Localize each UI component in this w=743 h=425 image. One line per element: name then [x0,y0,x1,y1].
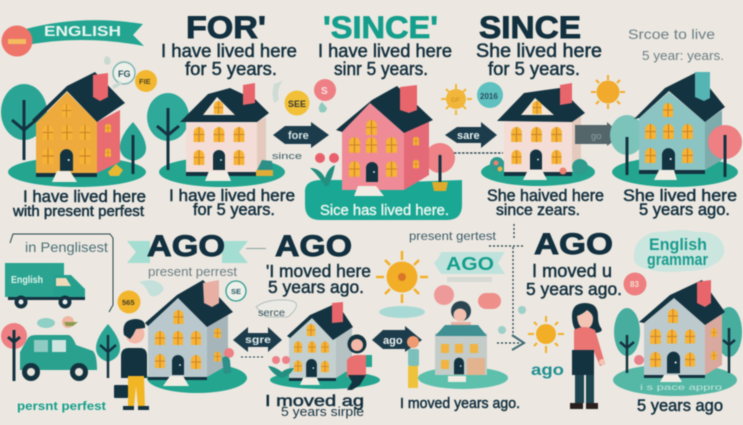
arrow: sare: sare [457,130,480,142]
label: 5 years ago: 5 years ago [637,397,723,415]
arrow: double sare [233,327,282,352]
scene: faded bubbles [379,277,526,334]
dashed connector [241,356,263,358]
icon: sun small [528,316,564,353]
scene: final house: i s pace appro [640,382,722,392]
scene: final house [613,280,742,396]
faded note: since to live [628,26,724,63]
label: house one: with present perfest [12,204,144,220]
dashed connector [489,224,523,343]
arrow: ago [372,326,422,352]
panel: pink house with teal caption: Sice has lived here. [320,203,449,219]
scene: yellow house [1,72,146,187]
heading: SINCE teal: I have lived here [318,41,452,61]
scene: teal house [610,72,742,187]
label: house two: for 5 years. [193,201,275,219]
label: persnt perfest: persnt perfest [17,399,106,413]
heading: AGO second [266,230,371,297]
faded note: since to live: Srcoe to live [628,26,715,42]
icon: sun [591,75,625,109]
label: house four [487,187,604,219]
icon: truck: English [11,275,43,286]
arrow: sare [445,122,497,148]
label: house one: I have lived here [23,187,146,206]
label: I moved ag: 5 years sirple [281,404,364,419]
heading: AGO third: I moved u [532,261,612,281]
badge: AGO ribbon [434,252,505,274]
badge: AGO ribbon: AGO [446,254,494,274]
heading: AGO third: AGO [534,228,613,261]
scene: cream house with dormer [147,83,285,187]
label: I moved ag [265,393,364,419]
label: house five [623,186,737,219]
label: house five: 5 years ago. [639,201,730,219]
icon: truck [5,263,85,308]
arrow: ago: ago [383,335,403,347]
icon: sun large [376,251,428,303]
bubble: serce: serce [258,308,285,319]
figure: standing woman [570,303,605,409]
heading: SINCE dark [476,9,602,79]
faded note: since to live: 5 year: years. [642,49,724,63]
badge: 2016: 2016 [480,92,498,101]
label: present pertest: present gertest [409,229,497,243]
badges: FG FIE: FIE [139,77,151,86]
cloud: English grammar [634,230,724,272]
panel: in Penglisest frame: in Penglisest [25,239,108,255]
arrow: fore [273,122,329,148]
arrow: go: go [591,131,602,142]
heading: FOR: I have lived here [161,41,297,61]
heading: SINCE teal: sinr 5 years. [334,59,428,79]
label: house four: since zears. [496,202,580,219]
label: I moved years ago: I moved years ago. [400,395,520,412]
figure: man with briefcase [114,319,149,410]
heading: AGO with ribbon [127,230,266,279]
icon: car with trees [1,323,120,381]
heading: AGO second: 5 years ago. [268,277,364,297]
scene: woman behind small house with kid [407,301,508,389]
arrow tip [512,335,524,350]
arrow: go [575,122,622,146]
label: house two: I have lived here [169,186,295,205]
English ribbon badge: ENGLISH [44,23,121,40]
cloud: English grammar: grammar [647,251,708,269]
bubble: serce [256,300,297,319]
heading: AGO with ribbon: present perrest [148,265,238,279]
scene: second cream house [481,83,595,186]
badges: SEE and S: S [321,86,328,97]
scene: grey house [139,280,247,393]
badges: SEE and S: SEE [288,99,306,109]
heading: SINCE dark: for 5 years. [488,59,580,79]
heading: SINCE teal: 'SINCE' [323,9,438,45]
cloud: English grammar: English [649,236,707,254]
badge: 2016 [477,82,503,108]
heading: FOR: for 5 years. [185,59,277,79]
badge: 565: 565 [122,298,135,307]
badge: 565 [118,290,140,314]
label: house four: She haived here [487,187,604,205]
label: house five: She lived here [623,186,737,205]
heading: AGO second: AGO [275,230,352,263]
label: I moved ag: I moved ag [265,393,364,410]
badge: 83: 83 [630,280,639,289]
English ribbon badge [2,20,144,56]
heading: AGO third [526,228,622,299]
dashed connector [454,152,503,154]
badge: 83 [624,272,646,296]
heading: FOR [161,9,297,79]
heading: AGO second: 'I moved here [266,261,371,281]
heading: FOR: FOR' [186,9,266,45]
label: ago: ago [531,362,564,379]
heading: SINCE dark: She lived here [476,41,602,62]
label: house one [12,187,146,220]
arrow: fore: fore [288,130,309,142]
arrow: double sare: sgre [245,334,271,346]
icon: sun with GF: GF [451,97,460,104]
badge: SE: SE [231,287,241,296]
small label: since: since [272,151,302,162]
badges: SEE and S [272,79,336,116]
heading: SINCE teal [318,9,452,79]
scene: small house with seated woman [268,302,380,390]
heading: SINCE dark: SINCE [479,9,581,45]
heading: AGO with ribbon: AGO [147,230,225,263]
panel: pink house with teal caption [305,85,462,220]
small decorative icons [37,316,78,328]
badge: SE [226,281,246,301]
heading: AGO third: 5 years ago. [526,279,622,299]
icon: sun with GF [441,84,472,115]
badges: FG FIE: FG [118,69,130,79]
badges: FG FIE [104,56,157,92]
label: house two [169,186,295,219]
panel: in Penglisest frame [10,234,113,312]
